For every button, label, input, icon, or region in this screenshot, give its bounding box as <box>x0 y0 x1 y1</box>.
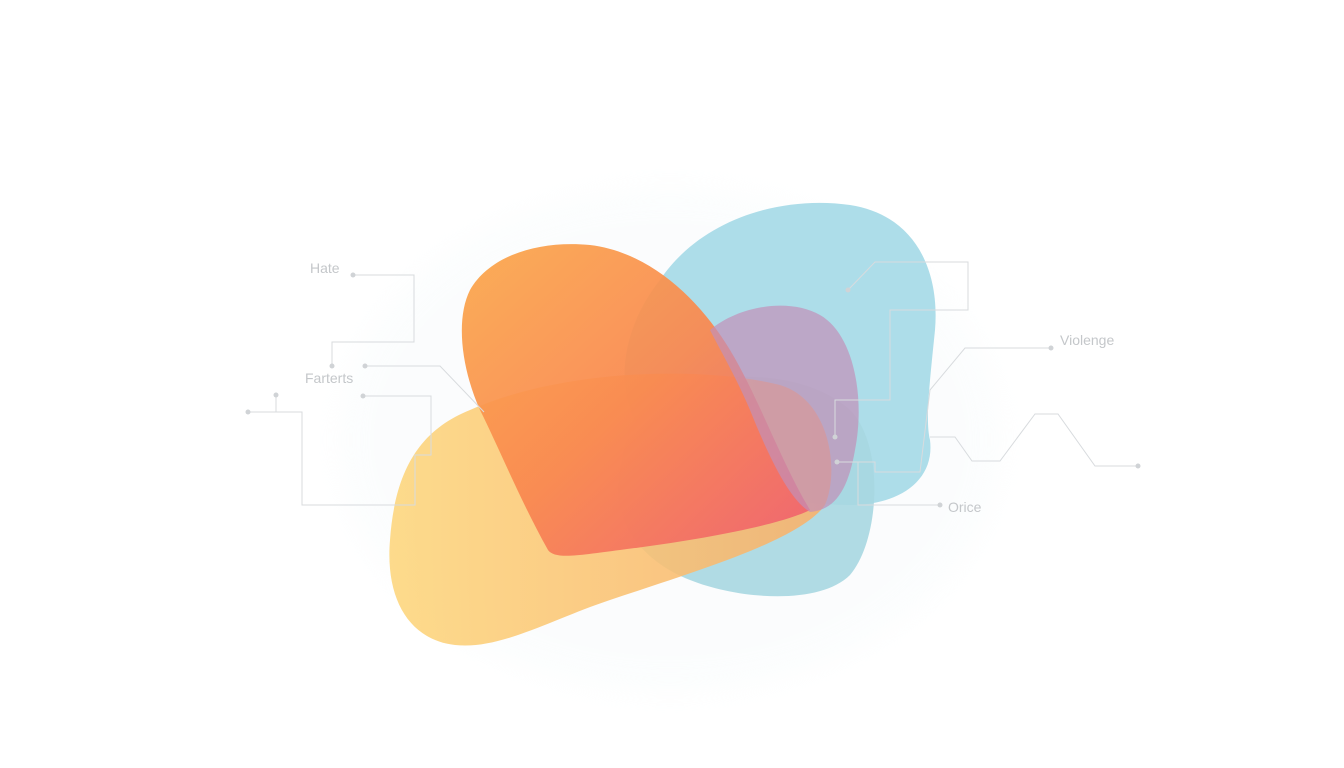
blob: yellow <box>389 374 831 646</box>
label: Violenge: Violenge <box>1060 332 1114 348</box>
label: Hate: Hate <box>310 260 340 276</box>
blob: orange <box>462 244 810 556</box>
connector dots <box>246 272 1140 508</box>
label: Farterts: Farterts <box>305 370 353 386</box>
soft glow background <box>340 190 1000 690</box>
label: Orice: Orice <box>948 499 982 515</box>
connector lines <box>248 262 1138 505</box>
blob: purple overlap <box>710 306 859 512</box>
blob: large blue <box>625 203 936 505</box>
blob: lower blue <box>618 377 874 596</box>
